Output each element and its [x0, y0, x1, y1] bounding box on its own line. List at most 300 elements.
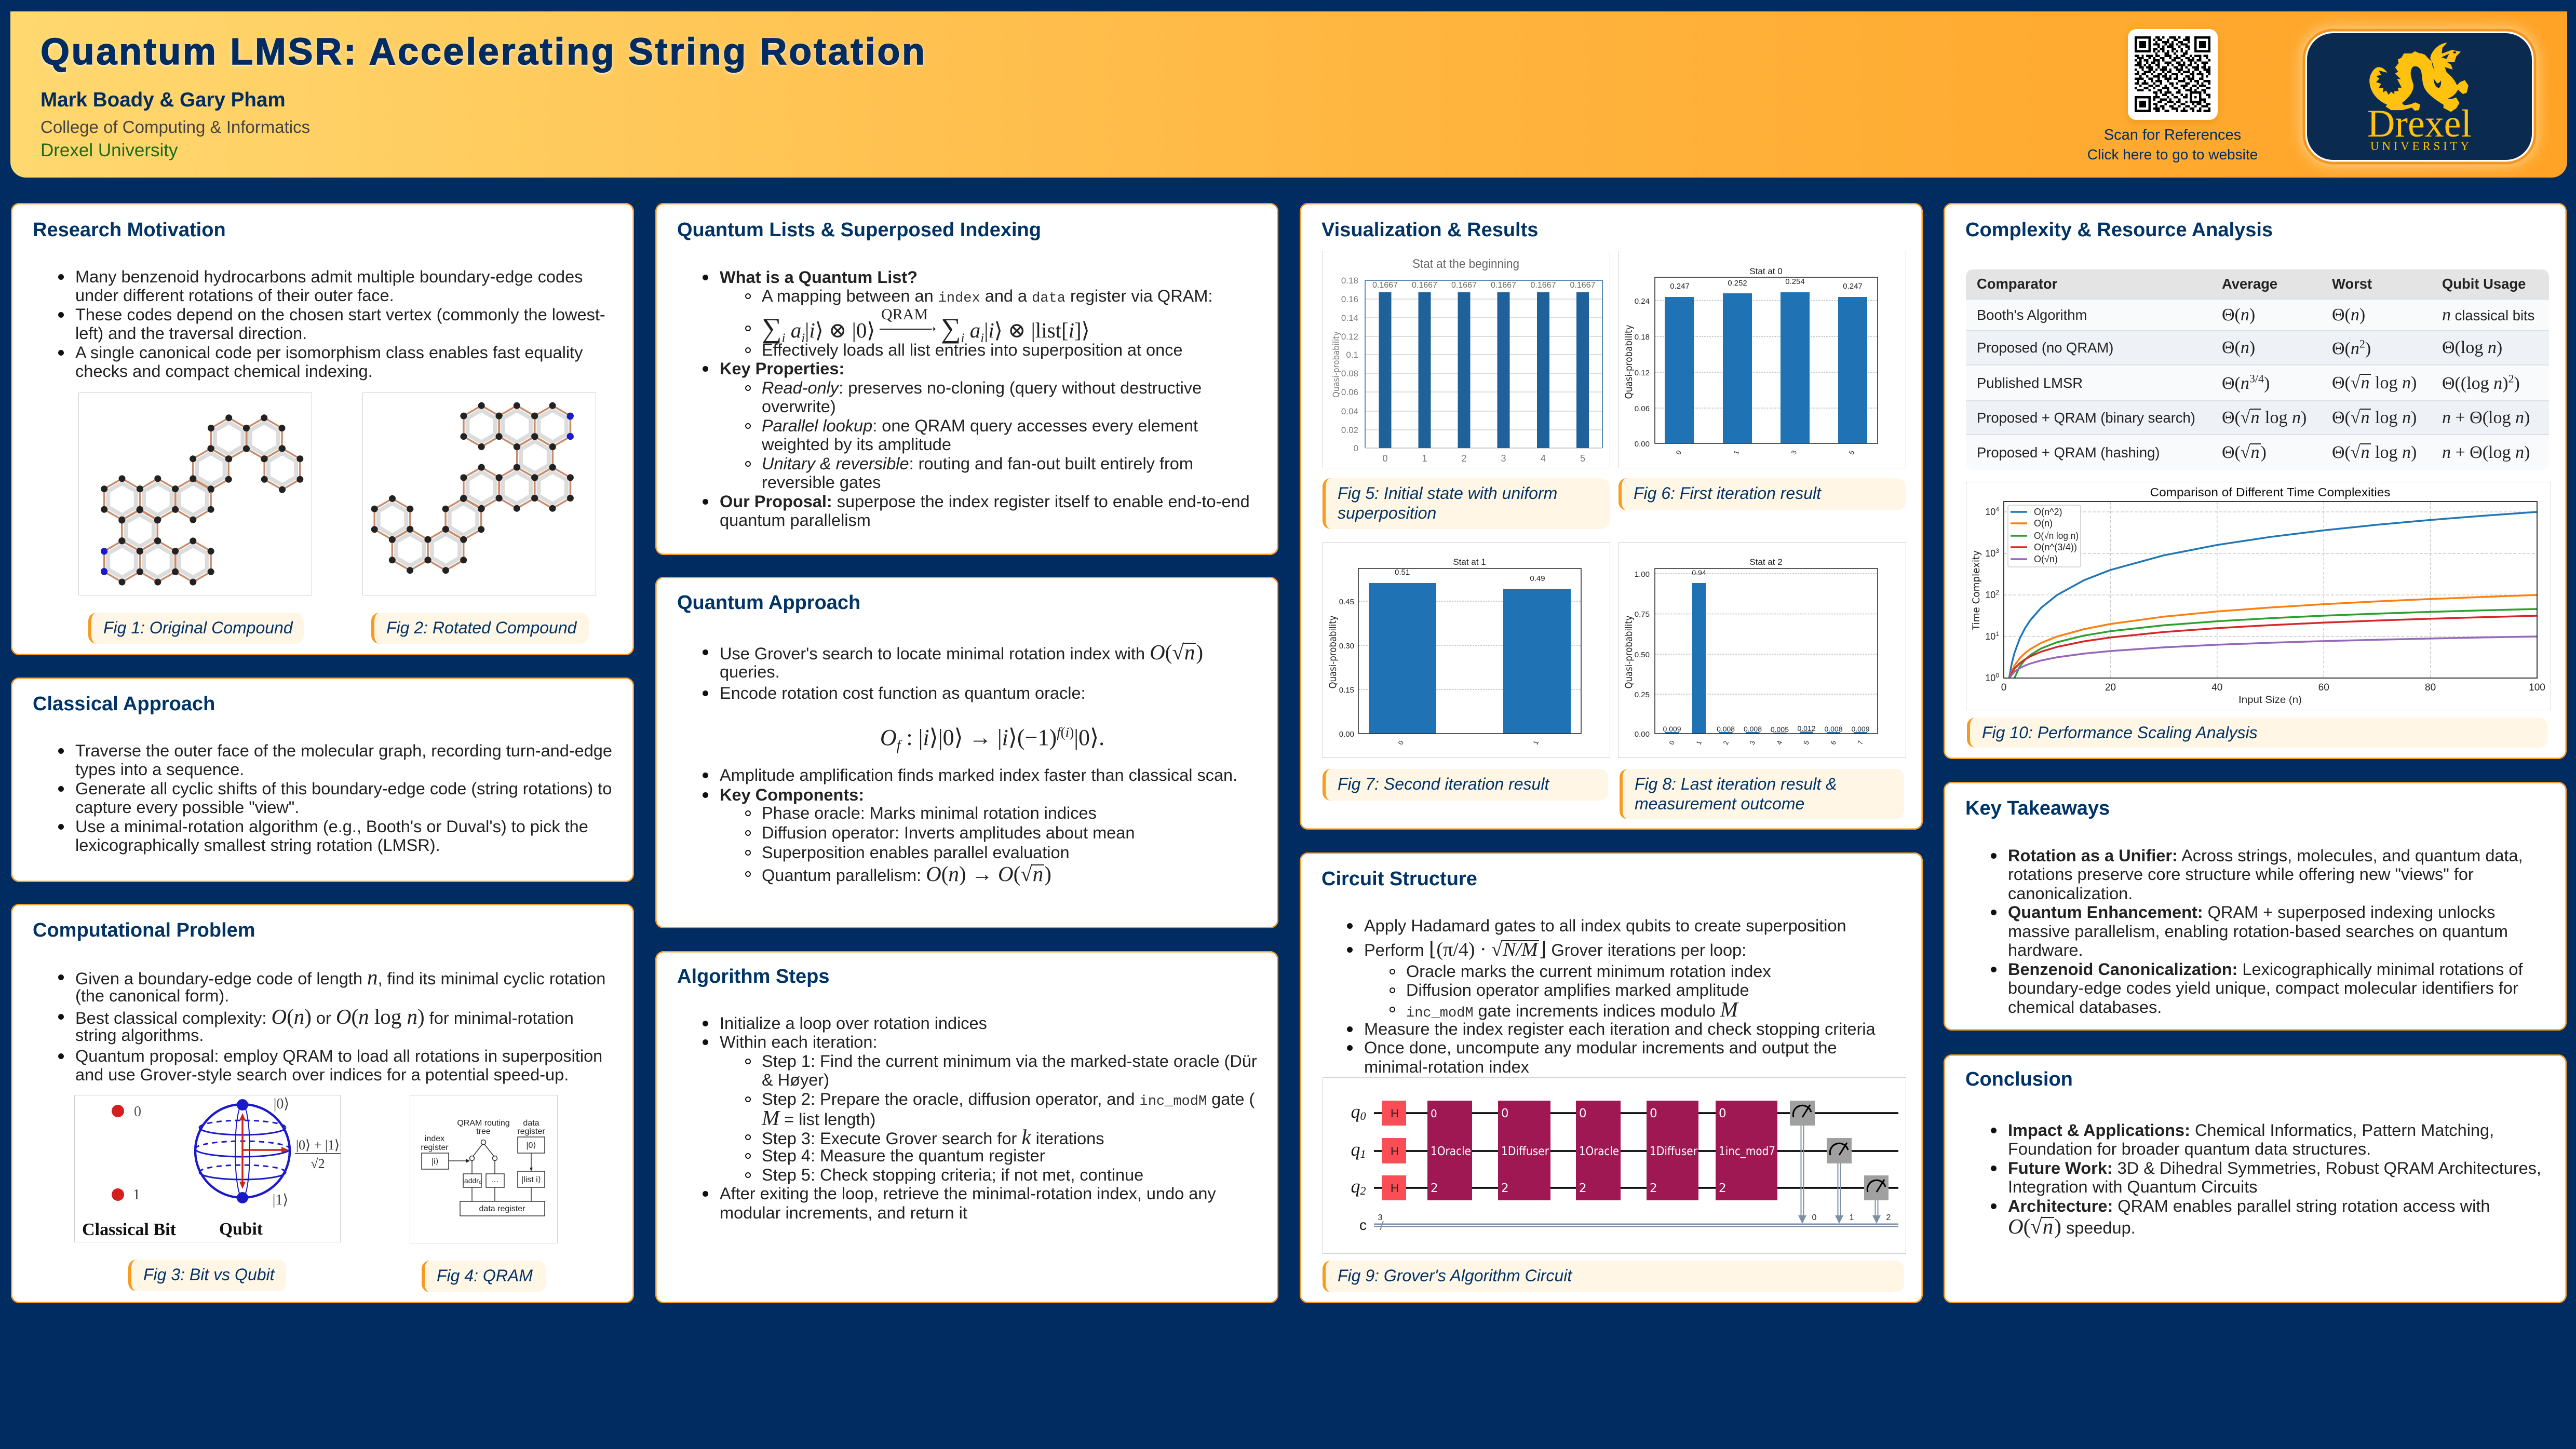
chart: first iteration: 5 [1847, 449, 1856, 455]
text block: Diffusion operator amplifies marked amplitude [1406, 981, 1749, 999]
chart: second iteration: 0.00 [1339, 730, 1354, 739]
chart: time complexities [1966, 482, 2551, 710]
figure: Grover circuit diagram: 0 [1650, 1107, 1657, 1120]
text block: canonicalization. [2008, 884, 2133, 903]
chart: last iteration: 0.94 [1692, 568, 1706, 577]
chart: first iteration: 0 [1674, 449, 1683, 455]
text block: Encode rotation cost function as quantum oracle: [720, 684, 1086, 702]
chart: time complexities: 100 [2529, 682, 2545, 693]
chart: first iteration: 0.254 [1785, 277, 1805, 286]
chart: time complexities: Time Complexity [1971, 550, 1982, 631]
table: n [2361, 373, 2370, 392]
chart: time complexities: 1 [1995, 630, 1999, 638]
chart: initial state: 5 [1580, 453, 1585, 464]
chart: time complexities: 10 [1985, 590, 1995, 600]
figure: Grover circuit diagram: 1Oracle [1579, 1145, 1619, 1158]
text block: Future Work: 3D & Dihedral Symmetries, Robust QRAM Architectures, [2008, 1159, 2541, 1177]
table: Θ(n) [2222, 338, 2255, 357]
figure: bit vs qubit: √2 [311, 1156, 325, 1171]
table: Θ(√ ) [2222, 442, 2267, 462]
text block: quantum parallelism [720, 511, 871, 530]
chart: initial state: 0.12 [1341, 332, 1358, 342]
chart: initial state: Quasi-probability [1331, 331, 1342, 398]
college: College of Computing & Informatics [41, 117, 310, 137]
figure: QRAM: |0⟩ [526, 1141, 536, 1150]
table: Θ(n) [2222, 305, 2255, 324]
text block: Many benzenoid hydrocarbons admit multiple boundary-edge codes [75, 267, 583, 286]
figure: QRAM: … [491, 1175, 499, 1184]
chart: initial state: 0 [1382, 453, 1388, 464]
figure: Grover circuit diagram: q [1351, 1176, 1360, 1197]
table: Θ(√ log n) [2222, 408, 2307, 427]
chart: time complexities: 10 [1985, 673, 1995, 683]
figure: Grover circuit diagram: 1inc_mod7 [1719, 1145, 1775, 1158]
caption fig 8: Fig 8: Last iteration result & [1635, 775, 1837, 793]
university: Drexel University [41, 140, 178, 160]
text block: Superposition enables parallel evaluation [762, 843, 1070, 862]
text block: Oracle marks the current minimum rotation index [1406, 962, 1771, 981]
caption fig 8: measurement outcome [1635, 794, 1804, 813]
text block: A mapping between an index and a data register via QRAM: [762, 287, 1212, 306]
chart: initial state: 0.02 [1341, 425, 1358, 435]
caption fig 7: Fig 7: Second iteration result [1338, 775, 1549, 793]
text block: n [1184, 640, 1195, 664]
chart: last iteration: 6 [1829, 739, 1838, 746]
chart: first iteration: 0.00 [1635, 440, 1650, 449]
figure: Grover circuit diagram: q [1351, 1101, 1360, 1122]
text block: Step 2: Prepare the oracle, diffusion operator, and inc_modM gate ( [762, 1090, 1255, 1109]
figure: Grover circuit diagram: 2 [1431, 1182, 1438, 1195]
caption fig 5: Fig 5: Initial state with uniform [1338, 484, 1557, 503]
text block: N/M [1503, 939, 1538, 960]
figure: Grover circuit diagram: 2 [1650, 1182, 1657, 1195]
caption fig 4 [422, 1261, 546, 1292]
table: n + Θ(log n) [2442, 408, 2530, 427]
text block: Quantum proposal: employ QRAM to load all rotations in superposition [75, 1047, 602, 1065]
chart: last iteration: Quasi-probability [1623, 616, 1635, 688]
table: Qubit Usage [2442, 276, 2526, 292]
chart: first iteration: 0.24 [1635, 297, 1650, 306]
text block: Effectively loads all list entries into superposition at once [762, 341, 1183, 359]
text block: After exiting the loop, retrieve the minimal-rotation index, undo any [720, 1184, 1216, 1203]
authors: Mark Boady & Gary Pham [41, 89, 286, 111]
website link: Click here to go to website [2087, 146, 2258, 162]
chart: initial state: 0.08 [1341, 369, 1358, 378]
caption fig 10: Fig 10: Performance Scaling Analysis [1982, 723, 2258, 742]
caption fig 6 [1619, 478, 1906, 510]
table: Proposed + QRAM (binary search) [1977, 409, 2195, 426]
panel: Classical Approach [11, 678, 634, 882]
text block: boundary-edge codes yield unique, compact molecular identifiers for [2008, 979, 2518, 997]
text block: Key Properties: [720, 359, 844, 378]
logo: Drexel University dragon: UNIVERSITY [2370, 140, 2469, 153]
text block: Phase oracle: Marks minimal rotation indices [762, 804, 1097, 822]
panel: Key Takeaways [1944, 782, 2567, 1031]
chart: time complexities: 0 [1995, 672, 1999, 679]
text block: Use Grover's search to locate minimal rotation index with O(√ ) [720, 640, 1203, 664]
figure: Grover circuit diagram: H [1391, 1182, 1399, 1195]
figure: Grover circuit diagram: 2 [1501, 1182, 1509, 1195]
table: Θ(√ log n) [2332, 373, 2417, 392]
table: Θ(n) [2332, 305, 2365, 324]
figure: bit vs qubit [74, 1095, 341, 1242]
figure: Grover circuit diagram: q [1351, 1139, 1360, 1160]
text block: Step 4: Measure the quantum register [762, 1146, 1045, 1165]
chart: last iteration: 0.00 [1635, 730, 1650, 739]
chart: second iteration: 0.30 [1339, 642, 1354, 651]
chart: initial state: 3 [1501, 453, 1506, 464]
figure: Grover circuit diagram: H [1391, 1145, 1399, 1158]
chart: last iteration: 4 [1775, 739, 1784, 746]
chart: initial state: 0.1 [1346, 350, 1358, 360]
text block: Perform ⌊(π/4) · √ ⌋ Grover iterations per loop: [1364, 939, 1746, 960]
text block: Apply Hadamard gates to all index qubits to create superposition [1364, 916, 1846, 935]
chart: initial state: 0.14 [1341, 313, 1358, 323]
header banner [10, 11, 2567, 178]
caption fig 9: Fig 9: Grover's Algorithm Circuit [1338, 1266, 1572, 1285]
chart: time complexities: 60 [2318, 682, 2329, 693]
text block: queries. [720, 662, 780, 681]
chart: second iteration: 0.15 [1339, 686, 1354, 695]
text block: Within each iteration: [720, 1033, 877, 1051]
chart: initial state: 1 [1422, 453, 1427, 464]
text block: Key Components: [720, 786, 864, 804]
table: n classical bits [2442, 305, 2534, 324]
table: Θ(√ log n) [2332, 408, 2417, 427]
chart: first iteration [1619, 251, 1906, 468]
figure: bit vs qubit: Classical Bit [82, 1220, 177, 1239]
chart: time complexities: 80 [2425, 682, 2436, 693]
qr code [2128, 29, 2218, 120]
text block: ∑i ai|i⟩ ⊗ |0⟩ [762, 313, 875, 345]
heading: Research Motivation [33, 219, 226, 241]
chart: time complexities: 20 [2105, 682, 2116, 693]
text block [1347, 916, 1876, 1076]
figure: Grover circuit diagram: 0 [1431, 1107, 1437, 1120]
chart: initial state: Stat at the beginning [1412, 257, 1519, 271]
figure: bit vs qubit: 1 [133, 1187, 140, 1203]
text block: reversible gates [762, 473, 881, 492]
table: Θ(√ log n) [2332, 442, 2417, 462]
panel: Research Motivation [11, 203, 634, 655]
panel: Complexity & Resource Analysis [1944, 203, 2567, 759]
table: Θ(n3/4) [2222, 372, 2270, 393]
chart: initial state: 0 [1354, 443, 1358, 453]
chart: initial state [1323, 251, 1610, 468]
figure: Grover circuit diagram: 1 [1360, 1147, 1366, 1160]
table: Θ(log n) [2442, 338, 2502, 357]
heading: Key Takeaways [1965, 797, 2110, 819]
figure: Grover circuit diagram: 0 [1501, 1107, 1509, 1120]
chart: first iteration: 0.252 [1728, 279, 1747, 288]
logo: Drexel University dragon: Drexel [2367, 102, 2472, 145]
heading: Computational Problem [33, 919, 255, 941]
chart: last iteration: 1 [1694, 739, 1703, 746]
text block: What is a Quantum List? [720, 268, 918, 287]
text block [1944, 1121, 2567, 1236]
text block: weighted by its amplitude [762, 435, 951, 454]
figure: Grover circuit diagram: 2 [1579, 1182, 1587, 1195]
text block: Foundation for broader quantum data structures. [2008, 1140, 2371, 1158]
text block: Parallel lookup: one QRAM query accesses every element [762, 416, 1198, 435]
chart: second iteration: 0.51 [1395, 568, 1410, 577]
figure: Grover circuit diagram: 3 [1378, 1213, 1383, 1222]
chart: time complexities: 0 [2001, 682, 2006, 693]
figure: Grover circuit diagram: 0 [1579, 1107, 1587, 1120]
figure: Grover circuit diagram [1323, 1077, 1906, 1254]
figure: Grover circuit diagram: 1 [1850, 1213, 1854, 1222]
text block: hardware. [2008, 941, 2083, 959]
text block: chemical databases. [2008, 998, 2162, 1017]
heading: Classical Approach [33, 693, 215, 715]
text block: Rotation as a Unifier: Across strings, molecules, and quantum data, [2008, 846, 2523, 865]
caption fig 9 [1323, 1261, 1904, 1292]
text block: Quantum Enhancement: QRAM + superposed indexing unlocks [2008, 903, 2495, 922]
chart: initial state: 0.04 [1341, 407, 1358, 416]
heading: Complexity & Resource Analysis [1965, 219, 2273, 241]
table: n [2251, 408, 2260, 427]
figure: Grover circuit diagram: 1Diffuser [1650, 1145, 1697, 1158]
caption fig 1: Fig 1: Original Compound [103, 618, 293, 637]
chart: last iteration: 5 [1802, 739, 1811, 746]
heading: Quantum Approach [677, 592, 860, 614]
figure: QRAM: data register [479, 1204, 525, 1213]
figure: QRAM: tree [476, 1127, 491, 1136]
text block [703, 268, 1250, 530]
chart: last iteration: 0.75 [1635, 610, 1650, 619]
text block: Generate all cyclic shifts of this boundary-edge code (string rotations) to [75, 779, 612, 798]
heading: Algorithm Steps [677, 966, 829, 987]
figure: Grover circuit diagram: c [1359, 1217, 1367, 1233]
figure: bit vs qubit: |0⟩ [274, 1096, 289, 1112]
table: n [2361, 442, 2370, 462]
text block: Our Proposal: superpose the index register itself to enable end-to-end [720, 492, 1250, 511]
table: n [2251, 442, 2260, 462]
chart: last iteration: 2 [1721, 739, 1730, 746]
text block: modular increments, and return it [720, 1203, 967, 1222]
table: Booth's Algorithm [1977, 306, 2087, 323]
text block: These codes depend on the chosen start vertex (commonly the lowest- [75, 305, 605, 324]
chart: last iteration [1619, 542, 1906, 758]
text block: Unitary & reversible: routing and fan-out built entirely from [762, 454, 1193, 473]
chart: first iteration: 3 [1789, 449, 1798, 455]
text block: types into a sequence. [75, 760, 244, 779]
caption fig 3 [128, 1260, 286, 1291]
figure: bit vs qubit: 0 [134, 1104, 141, 1120]
caption fig 2 [371, 613, 589, 644]
chart: time complexities: O(√n log n) [2034, 531, 2079, 541]
table: Θ((log n)2) [2442, 372, 2520, 393]
chart: last iteration: 0.009 [1663, 725, 1681, 733]
chart: initial state: 0.1667 [1570, 281, 1596, 290]
text block [703, 640, 1237, 886]
text block: n [1033, 862, 1043, 886]
chart: time complexities: Comparison of Different Time Complexities [2150, 485, 2391, 499]
text block: Use a minimal-rotation algorithm (e.g., Booth's or Duval's) to pick the [75, 817, 588, 836]
chart: first iteration: 0.12 [1635, 369, 1650, 377]
chart: time complexities: O(n^2) [2034, 507, 2062, 517]
chart: time complexities: 40 [2211, 682, 2222, 693]
chart: last iteration: 0.008 [1717, 725, 1735, 733]
figure: bit vs qubit: Qubit [219, 1220, 263, 1239]
chart: last iteration: 0.005 [1771, 725, 1789, 734]
chart: initial state: 0.1667 [1491, 281, 1516, 290]
chart: initial state: 0.18 [1341, 276, 1358, 286]
chart: second iteration: 0.49 [1530, 574, 1545, 583]
chart: initial state: 4 [1541, 453, 1546, 464]
figure: QRAM: |list i⟩ [521, 1175, 541, 1184]
table: Θ(n2) [2332, 337, 2371, 358]
text block [58, 267, 605, 381]
caption fig 6: Fig 6: First iteration result [1634, 484, 1821, 503]
chart: first iteration: 0.247 [1843, 282, 1863, 291]
panel: Algorithm Steps [655, 951, 1278, 1303]
chart: first iteration: 0.18 [1635, 333, 1650, 342]
chart: second iteration: 0.45 [1339, 598, 1354, 606]
table: Proposed (no QRAM) [1977, 340, 2113, 356]
text block: lexicographically smallest string rotation (LMSR). [75, 836, 440, 855]
chart: time complexities: 10 [1985, 507, 1995, 517]
chart: last iteration: 0 [1667, 739, 1676, 746]
text block: Amplitude amplification finds marked index faster than classical scan. [720, 766, 1237, 784]
chart: last iteration: 0.25 [1635, 690, 1650, 699]
text block: inc_modM gate increments indices modulo M [1406, 997, 1738, 1021]
chart: time complexities: 4 [1995, 506, 1999, 513]
text block [703, 1014, 1257, 1222]
text block: Measure the index register each iteration and check stopping criteria [1364, 1020, 1876, 1038]
figure: QRAM: QRAM routing [457, 1119, 510, 1128]
text block: minimal-rotation index [1364, 1058, 1529, 1076]
chart: time complexities: O(n^(3/4)) [2034, 542, 2077, 552]
caption fig 3: Fig 3: Bit vs Qubit [143, 1265, 275, 1284]
text block: Once done, uncompute any modular increments and output the [1364, 1038, 1837, 1057]
table: n [2361, 408, 2370, 427]
heading: Circuit Structure [1321, 868, 1477, 890]
chart: initial state: 0.06 [1341, 387, 1358, 397]
chart: time complexities: O(√n) [2034, 554, 2058, 564]
text block: O(√ ) speedup. [2008, 1214, 2136, 1238]
text block: Diffusion operator: Inverts amplitudes about mean [762, 823, 1135, 842]
qr label: Scan for References [2104, 127, 2241, 143]
chart: initial state: 0.1667 [1412, 281, 1437, 290]
figure: Grover circuit diagram: 2 [1360, 1184, 1366, 1197]
text block: ➝ [927, 323, 936, 335]
figure: bit vs qubit: |0⟩ + |1⟩ [296, 1137, 340, 1153]
text block: Architecture: QRAM enables parallel string rotation access with [2008, 1197, 2490, 1215]
chart: second iteration: Stat at 1 [1453, 557, 1486, 567]
figure: QRAM: index [425, 1134, 444, 1143]
chart: second iteration [1323, 542, 1610, 758]
text block: under different rotations of their outer face. [75, 286, 394, 305]
figure: Grover circuit diagram: 2 [1886, 1213, 1891, 1222]
figure: bit vs qubit: |1⟩ [273, 1192, 288, 1208]
heading: Visualization & Results [1321, 219, 1538, 241]
text block: M = list length) [762, 1106, 875, 1130]
text block: Initialize a loop over rotation indices [720, 1014, 987, 1033]
text block: Read-only: preserves no-cloning (query without destructive [762, 378, 1202, 397]
figure: QRAM: register [517, 1127, 545, 1136]
text block: Best classical complexity: O(n) or O(n log n) for minimal-rotation [75, 1005, 574, 1028]
chart: time complexities: 3 [1995, 547, 1999, 554]
figure: QRAM: register [421, 1143, 449, 1152]
chart: second iteration: 0 [1396, 739, 1405, 746]
chart: first iteration: 1 [1732, 449, 1741, 455]
text block: Given a boundary-edge code of length n, find its minimal cyclic rotation [75, 965, 605, 989]
text block: Benzenoid Canonicalization: Lexicographically minimal rotations of [2008, 960, 2523, 979]
chart: last iteration: Stat at 2 [1749, 557, 1783, 567]
chart: initial state: 0.1667 [1372, 281, 1398, 290]
chart: time complexities: 2 [1995, 589, 1999, 596]
panel: Computational Problem [11, 904, 634, 1303]
text block: Step 1: Find the current minimum via the marked-state oracle (Dür [762, 1052, 1257, 1071]
panel: Conclusion [1944, 1054, 2567, 1303]
chart: time complexities: 10 [1985, 548, 1995, 559]
table: Proposed + QRAM (hashing) [1977, 444, 2160, 460]
text block: QRAM [881, 306, 928, 323]
table [1966, 269, 2549, 470]
chart: last iteration: 7 [1856, 739, 1865, 746]
figure: Grover circuit diagram: 0 [1719, 1107, 1727, 1120]
caption fig 5: superposition [1338, 504, 1436, 522]
chart: last iteration: 3 [1748, 739, 1757, 746]
caption fig 10 [1967, 717, 2547, 748]
chart: time complexities: 10 [1985, 631, 1995, 642]
chart: second iteration: 1 [1531, 739, 1540, 746]
chart: second iteration: Quasi-probability [1327, 616, 1339, 688]
panel: Visualization & Results [1300, 203, 1923, 830]
text block: massive parallelism, enabling rotation-based searches on quantum [2008, 922, 2508, 941]
text block: & Høyer) [762, 1071, 829, 1089]
text block: Of : |i⟩|0⟩ → |i⟩(−1)f(i)|0⟩. [880, 725, 1104, 754]
chart: last iteration: 0.009 [1851, 725, 1870, 733]
figure: Grover circuit diagram: H [1391, 1107, 1399, 1120]
text block: Step 3: Execute Grover search for k iterations [762, 1125, 1104, 1149]
figure: Grover circuit diagram: 0 [1812, 1213, 1817, 1222]
text block: left) and the traversal direction. [75, 324, 307, 343]
text block: (the canonical form). [75, 986, 229, 1005]
text block: overwrite) [762, 397, 836, 416]
chart: initial state: 2 [1461, 453, 1467, 464]
title: Quantum LMSR: Accelerating String Rotation [41, 31, 927, 73]
caption fig 1 [88, 613, 304, 644]
figure: original compound [78, 392, 312, 595]
chart: last iteration: 0.012 [1797, 724, 1816, 733]
table: n + Θ(log n) [2442, 442, 2530, 462]
panel: Quantum Lists & Superposed Indexing [655, 203, 1278, 555]
chart: first iteration: Stat at 0 [1749, 266, 1783, 276]
chart: time complexities: Input Size (n) [2238, 695, 2302, 706]
figure: QRAM: data [523, 1119, 540, 1128]
heading: Quantum Lists & Superposed Indexing [677, 219, 1041, 241]
figure: rotated compound [362, 392, 596, 595]
caption fig 2: Fig 2: Rotated Compound [386, 618, 576, 637]
text block [58, 965, 605, 1084]
figure: Grover circuit diagram: 1Diffuser [1501, 1145, 1549, 1158]
chart: first iteration: 0.247 [1670, 282, 1690, 291]
text block: Quantum parallelism: O(n) → O(√ ) [762, 862, 1051, 886]
figure: QRAM [410, 1095, 558, 1243]
chart: first iteration: Quasi-probability [1623, 325, 1635, 399]
table: Comparator [1977, 276, 2057, 292]
text block: Integration with Quantum Circuits [2008, 1177, 2258, 1196]
table: Published LMSR [1977, 375, 2083, 390]
chart: last iteration: 0.008 [1824, 725, 1843, 733]
table: Worst [2332, 276, 2372, 292]
caption fig 8 [1620, 769, 1904, 819]
chart: last iteration: 1.00 [1635, 570, 1650, 579]
chart: last iteration: 0.50 [1635, 651, 1650, 659]
caption fig 5 [1323, 478, 1610, 529]
